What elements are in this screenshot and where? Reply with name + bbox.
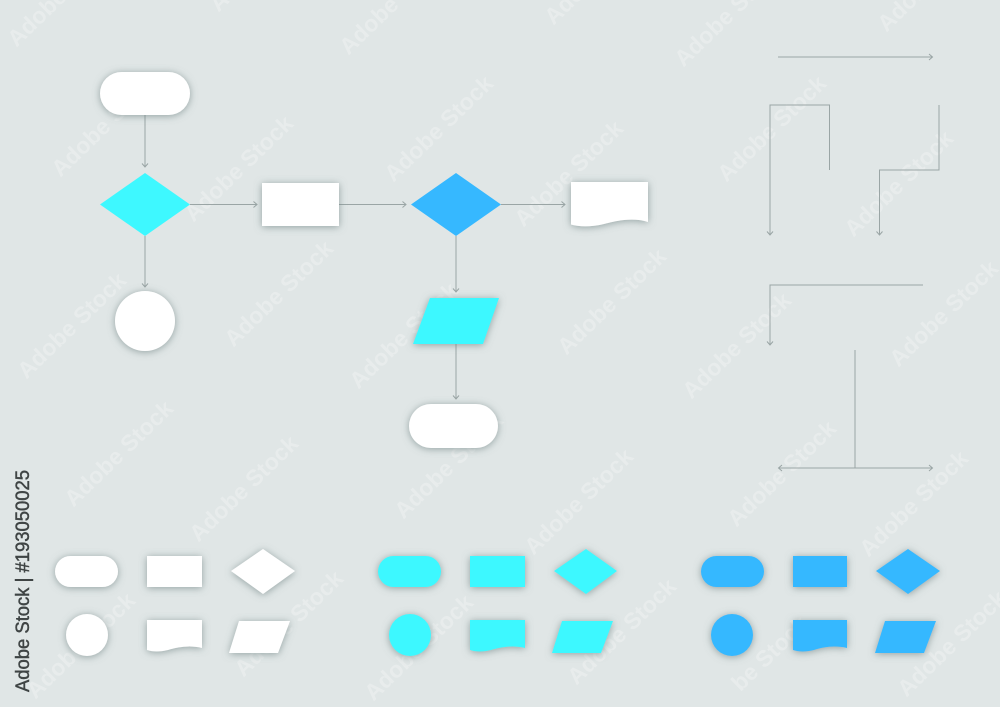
white parallelogram	[229, 621, 290, 653]
terminal circle	[115, 291, 175, 351]
arrow: decision to circle	[142, 236, 148, 287]
flowchart shapes	[100, 72, 648, 448]
blue parallelogram	[875, 621, 936, 653]
arrow: process to blue decision	[339, 202, 406, 208]
watermark pattern: Adobe Stock	[509, 115, 628, 231]
process rectangle	[262, 183, 339, 226]
watermark pattern: Adobe Stock	[219, 235, 338, 351]
arrow: data to end	[453, 344, 459, 399]
document shape	[571, 182, 648, 226]
end pill	[409, 404, 498, 448]
arrow: start to decision	[142, 115, 148, 167]
watermark pattern: Adobe Stock	[839, 125, 958, 241]
cyan shape set	[378, 549, 617, 656]
cyan decision diamond	[100, 173, 190, 236]
t-junction double arrow	[778, 350, 932, 471]
watermark pattern: Adobe Stock	[519, 443, 638, 559]
blue decision diamond	[411, 173, 501, 236]
blue pill	[701, 556, 764, 587]
cyan rectangle	[470, 556, 525, 587]
watermark pattern: Adobe Stock	[854, 445, 973, 561]
watermark pattern: Adobe Stock	[552, 243, 671, 359]
connector samples	[767, 54, 939, 471]
cyan circle	[389, 614, 431, 656]
cyan data parallelogram	[413, 298, 499, 344]
blue rectangle	[793, 556, 847, 587]
cyan pill	[378, 556, 441, 587]
watermark pattern: Adobe Stock	[359, 589, 478, 705]
watermark pattern: Adobe Stock	[562, 573, 681, 689]
arrow: blue decision to data	[453, 236, 459, 292]
cyan document	[470, 620, 525, 652]
blue document	[793, 620, 847, 652]
elbow arrow	[767, 285, 923, 345]
white document	[147, 620, 202, 652]
u-turn arrow	[767, 105, 830, 235]
white shape set	[55, 549, 295, 656]
watermark pattern: be Stock	[726, 610, 813, 696]
white circle	[66, 614, 108, 656]
watermark pattern: Adobe Stock	[344, 277, 463, 393]
blue circle	[711, 614, 753, 656]
cyan diamond	[554, 549, 617, 594]
watermark pattern: Adobe Stock	[21, 587, 140, 703]
watermark pattern: Adobe Stock	[179, 110, 298, 226]
watermark pattern: Adobe Stock	[722, 415, 841, 531]
watermark pattern: Adobe Stock	[46, 65, 165, 181]
white rectangle	[147, 556, 202, 587]
watermark pattern: Adobe Stock	[379, 70, 498, 186]
step arrow	[876, 105, 939, 235]
watermark pattern: Adobe Stock	[59, 395, 178, 511]
white pill	[55, 556, 118, 587]
watermark pattern: Adobe Stock	[677, 287, 796, 403]
straight arrow	[778, 54, 932, 60]
cyan parallelogram	[552, 621, 613, 653]
watermark pattern: Adobe Stock	[12, 267, 131, 383]
watermark pattern: Adobe Stock	[884, 255, 1000, 371]
watermark pattern: Adobe Stock	[712, 70, 831, 186]
blue diamond	[876, 549, 940, 594]
stock id text: Adobe Stock | #193050025	[13, 470, 34, 692]
flowchart connectors	[142, 115, 565, 399]
arrow: decision to process	[190, 202, 257, 208]
start pill	[100, 72, 190, 115]
watermark pattern: Adobe Stock	[229, 565, 348, 681]
arrow: blue decision to document	[501, 202, 565, 208]
watermark pattern: Adobe Stock	[184, 430, 303, 546]
blue shape set	[701, 549, 940, 656]
watermark pattern: Adobe Stock	[389, 407, 508, 523]
white diamond	[231, 549, 295, 594]
